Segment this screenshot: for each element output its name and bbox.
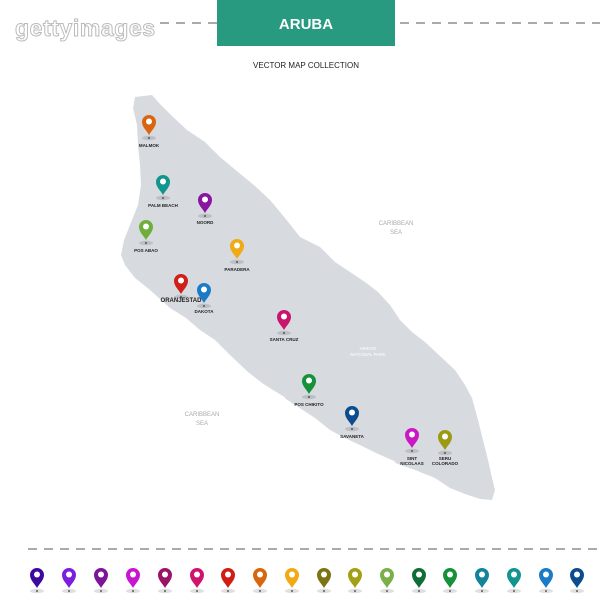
map pins: SINT [407, 456, 417, 461]
map pins: COLORADO [432, 461, 459, 466]
sea labels: SEA [390, 230, 402, 236]
park label: ARIKOK [359, 346, 377, 351]
map: Aruba [121, 95, 495, 500]
watermark: gettyimages [15, 15, 155, 41]
title box: ARUBA [279, 16, 333, 33]
map pins: DAKOTA [195, 309, 214, 314]
map pins: NOORD [197, 220, 214, 225]
sea labels [185, 221, 413, 427]
map pins: NICOLAAS [400, 461, 424, 466]
map pins: MALMOK [139, 143, 160, 148]
map pins: POS CHIKITO [294, 402, 324, 407]
color pin palette [30, 568, 584, 593]
title box [217, 0, 395, 46]
subtitle: VECTOR MAP COLLECTION [253, 61, 359, 70]
map pins [134, 115, 459, 466]
park label [350, 346, 386, 357]
map pins: SANTA CRUZ [270, 337, 299, 342]
header dashed line [160, 22, 600, 24]
sea labels: CARIBBEAN [379, 221, 413, 227]
map pins: SERU [439, 456, 451, 461]
map pins: PALM BEACH [148, 203, 178, 208]
park label: NATIONAL PARK [350, 352, 386, 357]
bottom dashed line [28, 548, 600, 550]
map pins: SAVANETA [340, 434, 365, 439]
map pins: PARADERA [224, 267, 250, 272]
sea labels: SEA [196, 421, 208, 427]
map pins: POS ABAO [134, 248, 158, 253]
sea labels: CARIBBEAN [185, 412, 219, 418]
map pins: ORANJESTAD [161, 298, 202, 304]
